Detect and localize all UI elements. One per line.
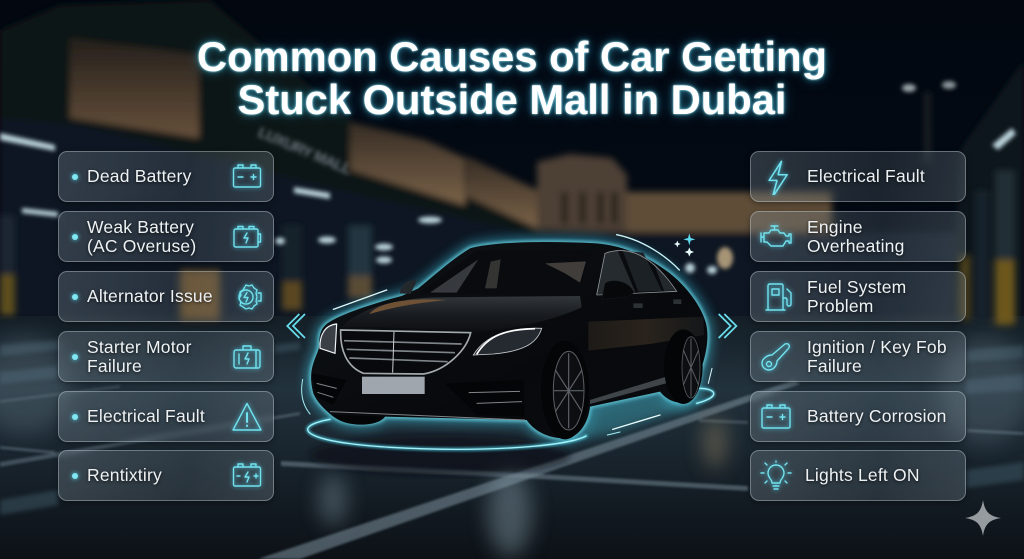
- left chevrons: [287, 314, 305, 338]
- card: Dead Battery: [58, 151, 274, 202]
- card: Electrical Fault (right): Electrical Fault: [807, 166, 925, 186]
- front wheel: [541, 341, 589, 439]
- body side reflections: [588, 317, 704, 351]
- sparkles: [674, 233, 695, 257]
- card: Fuel System Problem: Fuel System: [807, 277, 906, 297]
- card: Battery Corrosion: Battery Corrosion: [807, 406, 947, 426]
- ground markings: [0, 380, 1024, 559]
- card: Weak Battery (AC Overuse): [58, 211, 274, 262]
- card: Electrical Fault (right): [750, 151, 966, 202]
- windshield: [418, 251, 592, 295]
- card: Battery Corrosion: [750, 391, 966, 442]
- ground glow and ring: [302, 235, 714, 449]
- card: Rentixtiry: Rentixtiry: [87, 465, 162, 485]
- card: Dead Battery: Dead Battery: [87, 166, 192, 186]
- ground streaks: [0, 340, 1024, 515]
- title: Common Causes of Car Getting: [197, 33, 827, 80]
- card: Weak Battery (AC Overuse): (AC Overuse): [87, 236, 196, 256]
- license plate: [362, 377, 425, 394]
- hood: [342, 296, 582, 333]
- car body: [311, 242, 707, 438]
- title: Stuck Outside Mall in Dubai: [238, 76, 786, 123]
- card: Alternator Issue: [58, 271, 274, 322]
- card: Ignition / Key Fob Failure: Ignition / Key Fob: [807, 337, 947, 357]
- icon: sparkle watermark: [965, 500, 1001, 536]
- grille: [341, 330, 471, 374]
- ground: [0, 316, 1024, 559]
- rear wheel: [664, 329, 703, 404]
- lights: [0, 81, 1016, 274]
- side windows: [597, 250, 635, 294]
- headlights: [320, 324, 337, 353]
- card: Weak Battery (AC Overuse): Weak Battery: [87, 217, 194, 237]
- card: Ignition / Key Fob Failure: [750, 331, 966, 382]
- card: Alternator Issue: Alternator Issue: [87, 286, 213, 306]
- card: Electrical Fault: Electrical Fault: [87, 406, 205, 426]
- card: Electrical Fault: [58, 391, 274, 442]
- card: Starter Motor Failure: [58, 331, 274, 382]
- title: [192, 33, 832, 123]
- card: Engine Overheating: Engine: [807, 217, 863, 237]
- card: Lights Left ON: Lights Left ON: [805, 465, 920, 485]
- mall sign: LUXURY MALL: [255, 124, 354, 179]
- car outline glow: [311, 242, 707, 438]
- card: Starter Motor Failure: Failure: [87, 356, 142, 376]
- card: Rentixtiry: [58, 450, 274, 501]
- card: Fuel System Problem: Problem: [807, 296, 874, 316]
- front tyre: [333, 415, 385, 425]
- mirrors: [400, 280, 417, 294]
- card: Fuel System Problem: [750, 271, 966, 322]
- lower bumper: [312, 373, 347, 405]
- right chevrons: [719, 314, 736, 338]
- card: Ignition / Key Fob Failure: Failure: [807, 356, 862, 376]
- card: Engine Overheating: [750, 211, 966, 262]
- card: Engine Overheating: Overheating: [807, 236, 905, 256]
- card: Starter Motor Failure: Starter Motor: [87, 337, 192, 357]
- card: Lights Left ON: [750, 450, 966, 501]
